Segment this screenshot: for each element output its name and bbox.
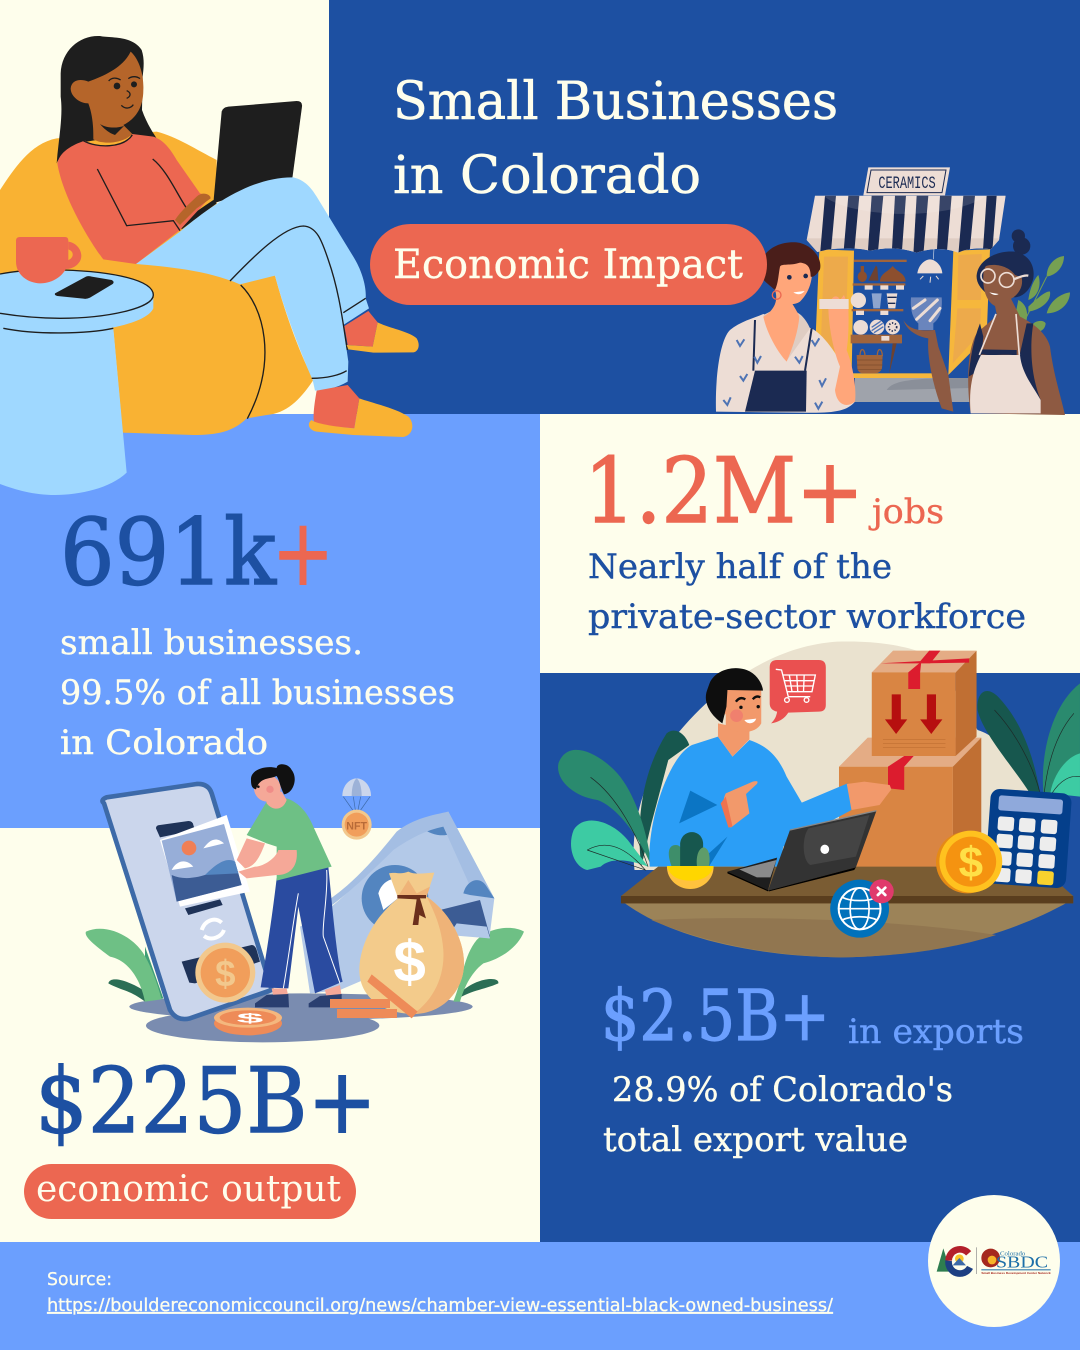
text: export description xyxy=(603,1070,953,1160)
money bag xyxy=(359,872,464,1014)
shop shelves and ceramics xyxy=(851,260,907,373)
logo: tree and Colorado C xyxy=(937,1248,970,1274)
banknote xyxy=(300,812,494,993)
woman xyxy=(237,764,343,1007)
man xyxy=(649,668,891,867)
text: small businesses description: 99.5% of all businesses xyxy=(60,673,455,713)
leaves xyxy=(86,928,524,1002)
coin on phone: $ xyxy=(215,953,236,994)
panel: small business count xyxy=(0,414,540,828)
woman right: vase xyxy=(911,297,942,330)
floor coin: $ xyxy=(237,1010,265,1025)
beanbag xyxy=(0,132,313,435)
economic output pill xyxy=(24,1164,356,1219)
logo: SBDC wordmark xyxy=(981,1249,1051,1275)
plants left xyxy=(558,731,689,870)
woman right: hair bun and head xyxy=(1012,229,1025,243)
stat: $2.5B+ in exports xyxy=(601,975,1024,1057)
speech bubble with cart xyxy=(770,660,826,723)
stat: $2.5B+ in exports: $2.5B+ xyxy=(601,975,830,1057)
logo: Colorado SBDC badge xyxy=(928,1195,1060,1327)
panel: jobs xyxy=(540,414,1080,673)
laptop xyxy=(727,811,877,891)
text: small businesses description xyxy=(60,623,455,763)
panel: footer xyxy=(0,1242,1080,1350)
coffee cup xyxy=(16,237,81,283)
stat: 691k+ small businesses: 691k xyxy=(60,499,277,606)
shop sign xyxy=(863,167,950,195)
face xyxy=(71,52,143,143)
plant xyxy=(1015,256,1070,332)
title: Small Businesses xyxy=(393,72,838,132)
source citation: https://bouldereconomiccouncil.org/news/chamber-view-essential-black-owned-business/ xyxy=(47,1295,834,1316)
logo: SBDC wordmark: Colorado xyxy=(1000,1250,1026,1257)
desk xyxy=(621,867,1073,903)
potted cactus xyxy=(667,832,714,889)
hair xyxy=(57,36,157,163)
subtitle pill xyxy=(370,224,767,305)
text: workforce description xyxy=(588,547,1026,637)
pointing hands xyxy=(723,781,758,828)
gold dollar coin: $ xyxy=(959,840,983,887)
calculator xyxy=(984,788,1072,889)
stat: $2.5B+ in exports: in exports xyxy=(848,1012,1024,1052)
illustration: man selling online with boxes xyxy=(558,641,1080,957)
side table xyxy=(0,270,153,495)
phone xyxy=(55,276,114,299)
NFT parachute coin xyxy=(342,778,372,840)
shop sign: CERAMICS xyxy=(878,175,936,194)
subtitle pill: Economic Impact xyxy=(393,242,743,288)
beige backdrop xyxy=(634,641,1050,870)
woman left: arm and hand xyxy=(828,295,855,405)
source citation: Source: xyxy=(47,1269,112,1290)
trousers xyxy=(136,177,369,391)
illustration: woman, phone and money xyxy=(86,764,524,1042)
illustration: ceramics shop with two women xyxy=(716,167,1070,415)
striped awning xyxy=(806,196,1006,253)
shelf bowl xyxy=(623,902,1069,957)
stat: $225B+: $225B+ xyxy=(35,1049,377,1154)
panel: economic output xyxy=(0,828,540,1242)
stat: 1.2M+ jobs: 1.2M+ xyxy=(584,439,864,544)
money bag: $ xyxy=(393,930,426,995)
panel: exports xyxy=(540,673,1080,1242)
stat: 1.2M+ jobs: jobs xyxy=(868,492,944,532)
text: workforce description: private-sector workforce xyxy=(588,597,1026,637)
ground shadow xyxy=(129,993,473,1042)
stat: 691k+ small businesses: + xyxy=(272,499,334,606)
economic output pill: economic output xyxy=(36,1169,342,1210)
woman right: body xyxy=(903,229,1065,415)
source citation xyxy=(47,1269,834,1316)
cardboard boxes xyxy=(839,651,981,867)
coin on phone xyxy=(195,943,255,1003)
plants right xyxy=(977,683,1080,797)
phone xyxy=(102,784,272,1019)
NFT parachute coin: NFT xyxy=(346,820,368,832)
logo: SBDC wordmark: SBDC xyxy=(996,1252,1048,1271)
floor coin xyxy=(214,1008,282,1028)
slippers xyxy=(309,311,419,437)
gold dollar coin xyxy=(936,831,1002,893)
lamp xyxy=(917,248,942,283)
shutters xyxy=(815,249,990,402)
title: in Colorado xyxy=(393,146,701,206)
text: workforce description: Nearly half of the xyxy=(588,547,892,587)
text: small businesses description: in Colorado xyxy=(60,723,268,763)
text: export description: total export value xyxy=(603,1120,908,1160)
title xyxy=(393,72,838,206)
logo: SBDC wordmark: Small Business Development Center Network xyxy=(981,1271,1051,1275)
panel: header xyxy=(329,0,1080,414)
text: export description: 28.9% of Colorado's xyxy=(612,1070,953,1110)
woman left: head xyxy=(771,262,812,304)
text: small businesses description: small businesses. xyxy=(60,623,363,663)
woman left: body xyxy=(716,242,855,413)
illustration: woman with laptop on beanbag xyxy=(0,36,419,495)
sweater xyxy=(57,134,211,264)
coin stacks xyxy=(214,974,418,1035)
laptop xyxy=(213,101,302,203)
globe badge xyxy=(830,879,894,938)
